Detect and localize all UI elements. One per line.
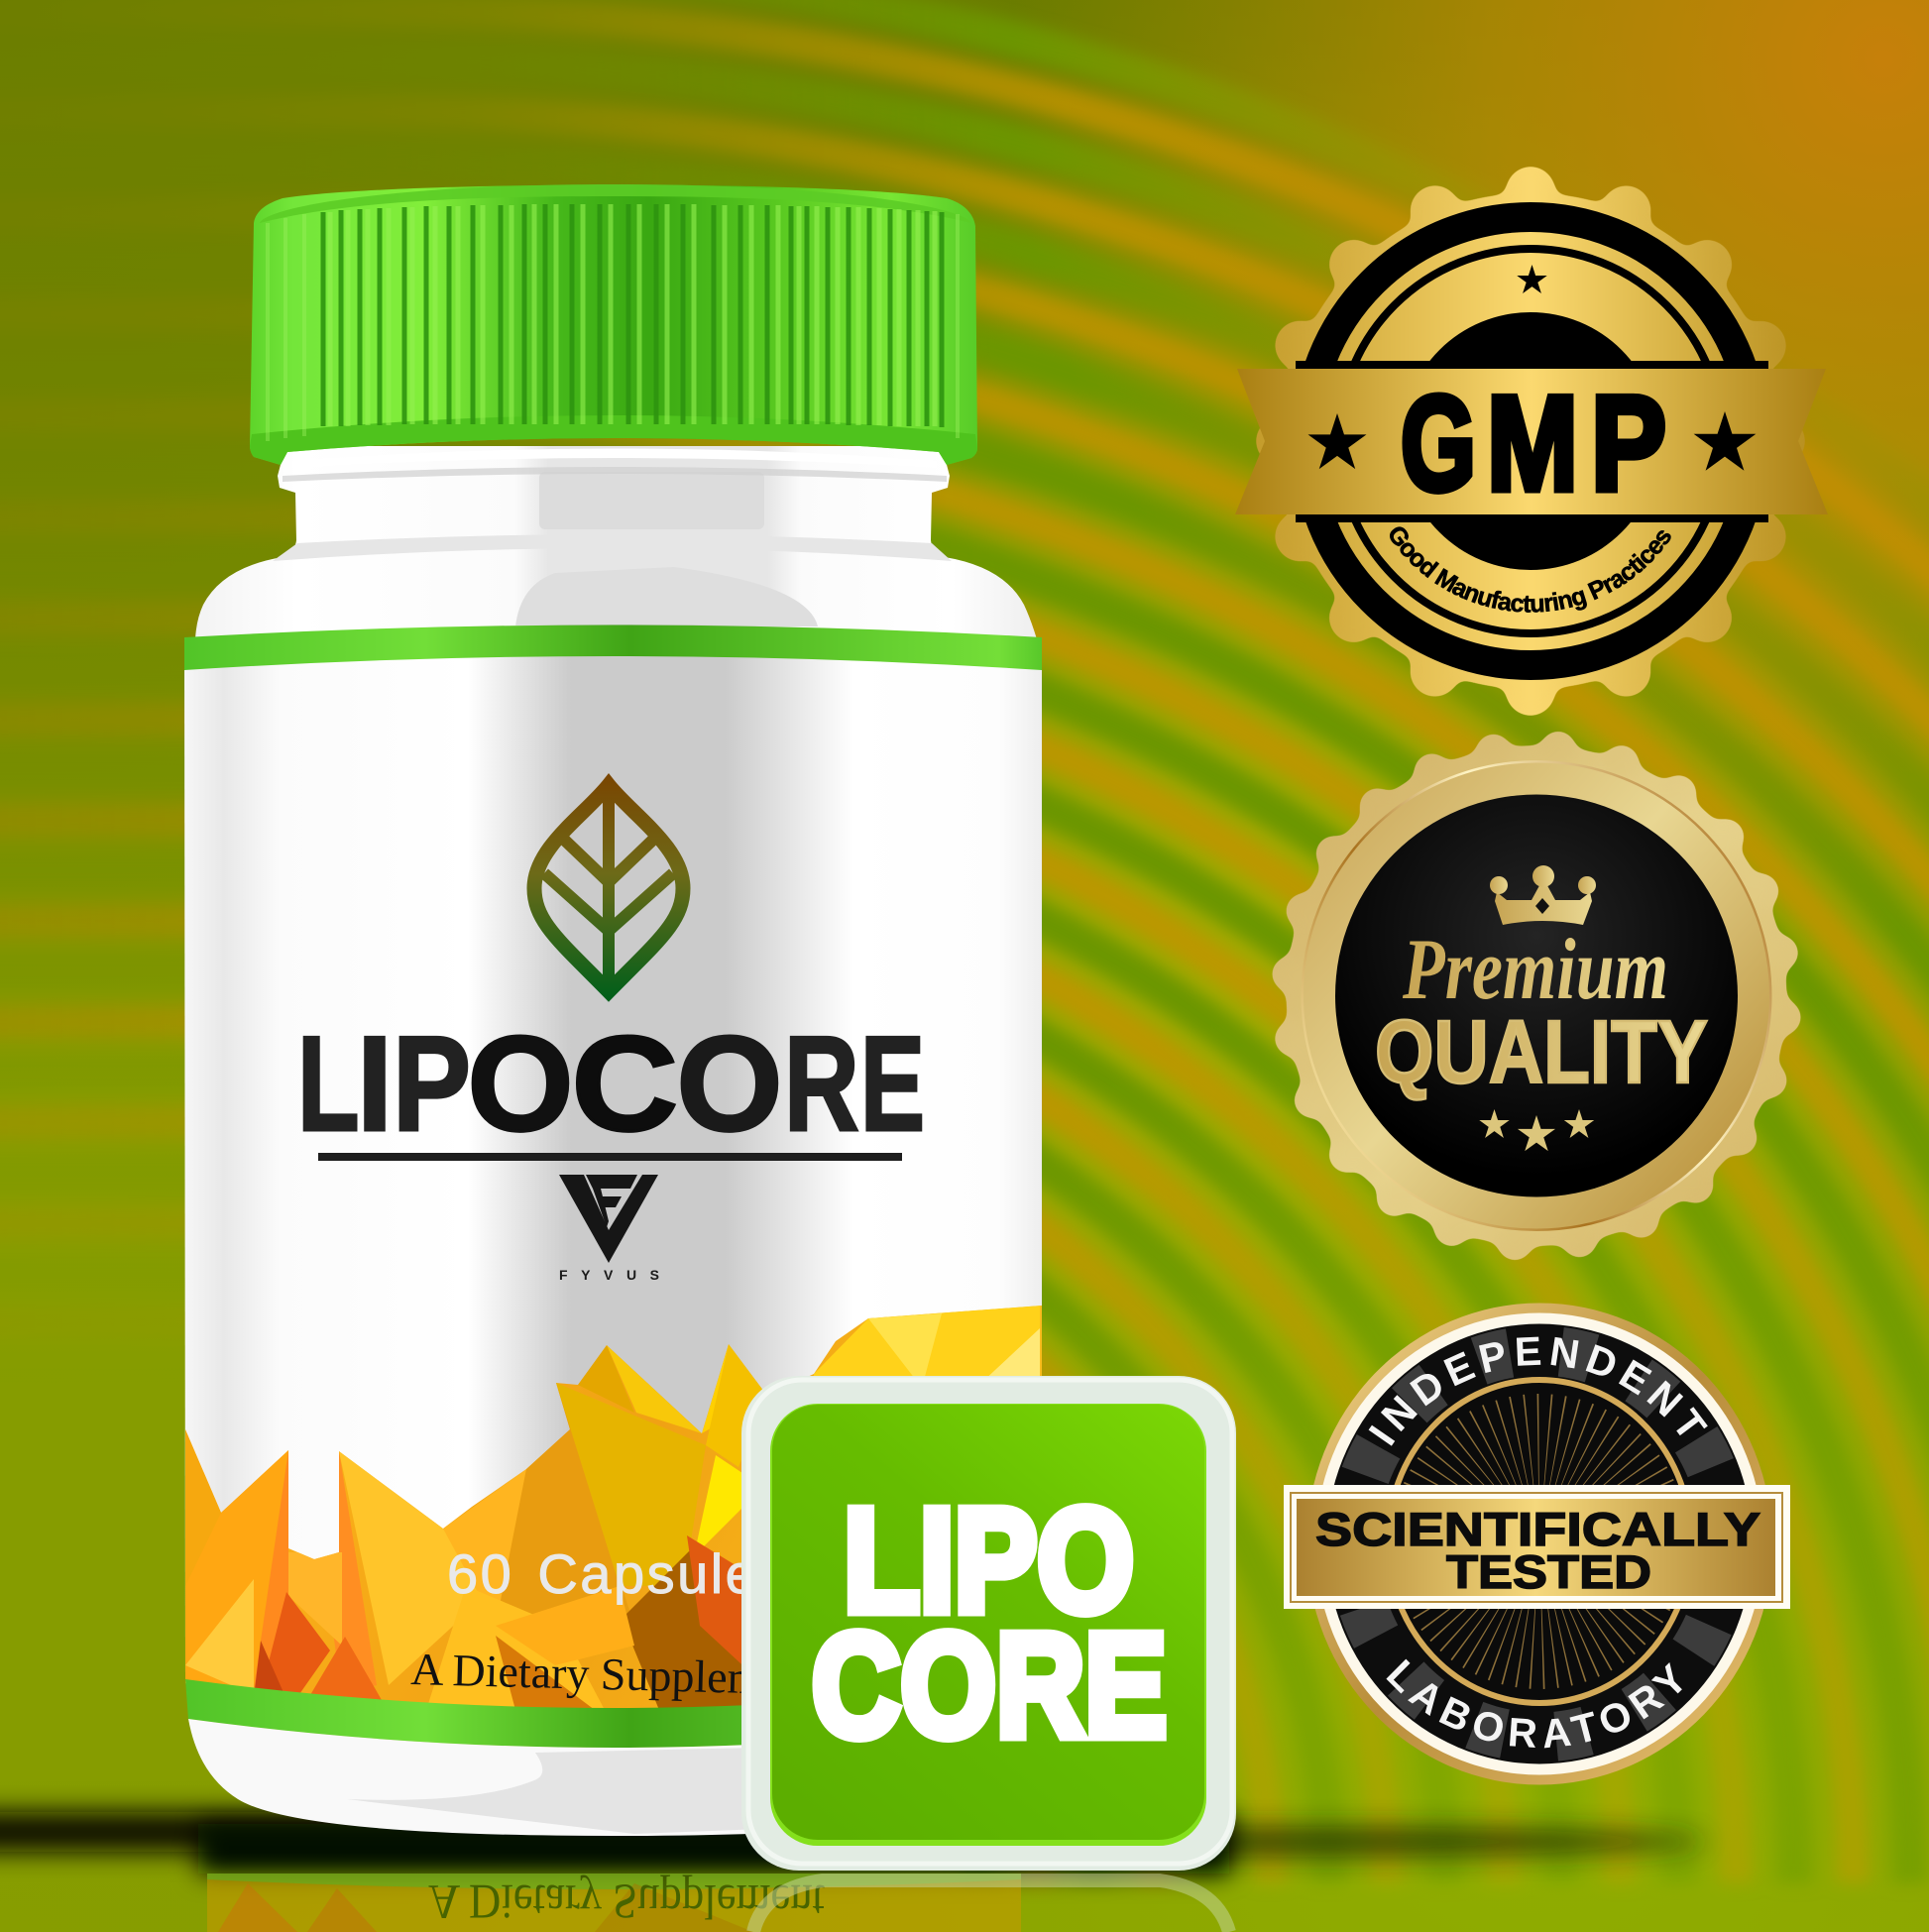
brand name: P: [393, 1008, 471, 1159]
neck and shoulder: [195, 446, 1037, 639]
brand name: E: [860, 1008, 925, 1159]
tile text: LIPO: [844, 1479, 1134, 1643]
dietary supplement text: A Dietary Supplement: [410, 1644, 820, 1705]
floor shadow: [0, 1812, 1705, 1874]
crown icon: [1490, 865, 1596, 925]
premium script: Premium: [1402, 922, 1668, 1018]
premium stars: [1479, 1109, 1594, 1151]
label artwork: polygon flames: [185, 1306, 1042, 1742]
capsule count: 60 Capsules: [447, 1542, 789, 1605]
brand name: I: [357, 1008, 393, 1159]
bottle: [184, 184, 1042, 1836]
premium scalloped seal: [1268, 728, 1805, 1264]
reflected text: A Dietary Supplement: [428, 1875, 825, 1930]
GMP text: M: [1487, 368, 1578, 518]
GMP text: G: [1401, 368, 1476, 518]
brand name: O: [676, 1008, 783, 1159]
GMP text: [1401, 368, 1666, 518]
scientifically tested plaque: TESTED: [1446, 1545, 1651, 1598]
GMP scalloped seal: [1281, 191, 1780, 691]
leaf logo: [534, 783, 683, 991]
neck shading: [273, 448, 952, 626]
brand name: [297, 1008, 925, 1159]
brand name: C: [571, 1008, 678, 1159]
bottle reflection: [207, 1874, 1021, 1932]
badge: premium quality: [1268, 728, 1805, 1264]
upper green band: [184, 625, 1042, 670]
brand name: R: [784, 1008, 859, 1159]
scientifically tested plaque: [1284, 1485, 1790, 1609]
icon: fyvus logo: [559, 1175, 658, 1263]
laboratory arc: LABORATORY: [1386, 1659, 1682, 1749]
cap ribs: [323, 204, 942, 427]
quality word: QUALITY: [1375, 1003, 1708, 1102]
ring segments: [1353, 1350, 1726, 1737]
label panel: [184, 625, 1042, 1711]
GMP ribbon: [1235, 369, 1828, 514]
inner sunburst: [1388, 1380, 1691, 1703]
fyvus wordmark: FYVUS: [559, 1267, 659, 1283]
brand name: L: [297, 1008, 359, 1159]
scientifically tested plaque: SCIENTIFICALLY: [1315, 1503, 1760, 1555]
product tile: [741, 1376, 1236, 1871]
GMP curved caption: Good Manufacturing Practices: [1390, 526, 1671, 613]
independent arc: INDEPENDENT: [1368, 1336, 1708, 1446]
lower green band: [185, 1679, 1042, 1748]
GMP text: P: [1591, 368, 1666, 518]
cap: [250, 184, 977, 465]
badge: GMP: [1235, 167, 1828, 716]
bottle base: [188, 1719, 1039, 1836]
brand name: O: [468, 1008, 573, 1159]
GMP stars: [1308, 265, 1756, 471]
reflected tile edge: [753, 1880, 1229, 1932]
badge: independent laboratory: [1284, 1303, 1790, 1784]
divider: [318, 1153, 902, 1161]
product tile: CORE: [812, 1604, 1167, 1767]
